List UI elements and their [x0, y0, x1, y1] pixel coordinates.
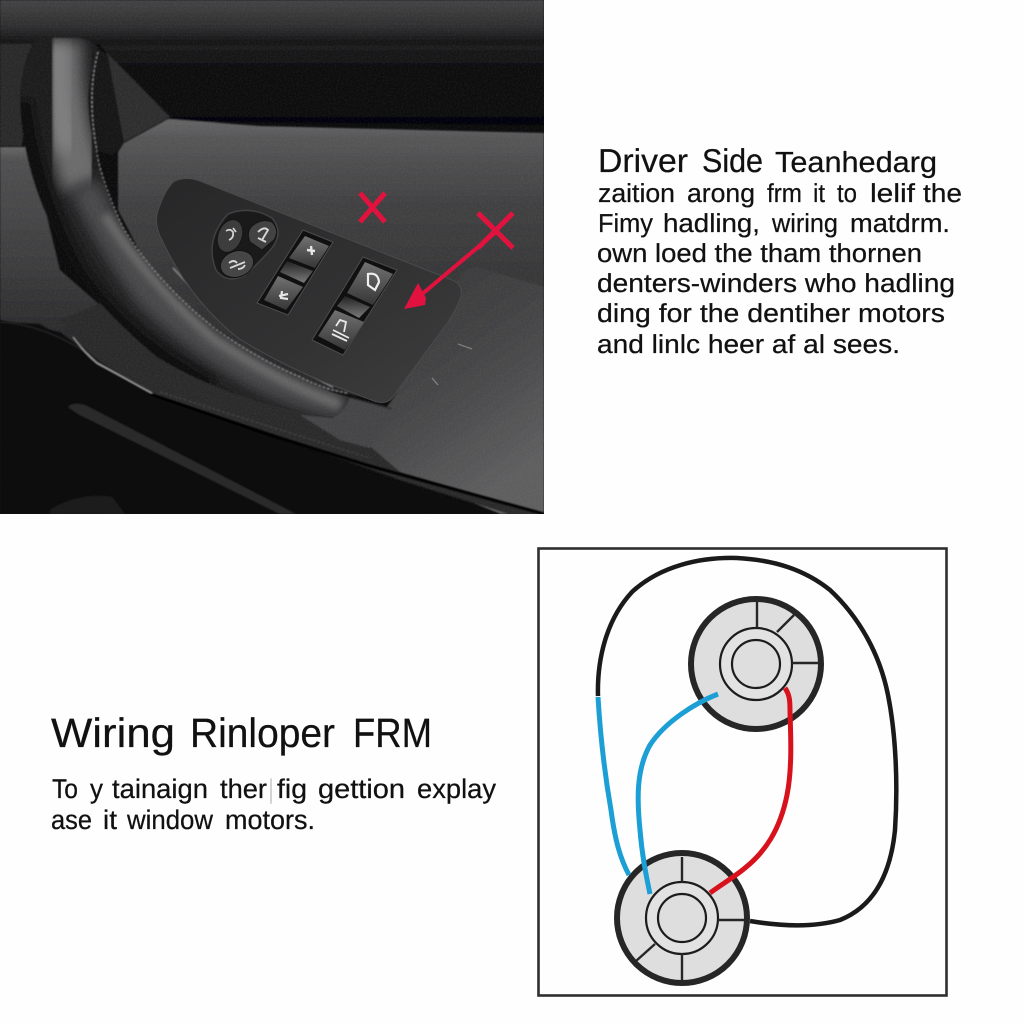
text block: wiring description: |: [269, 774, 273, 804]
text block: driver side description: and linlc heer af al sees.: [597, 329, 900, 359]
text block: driver side description: it: [813, 178, 826, 208]
text block: driver side description: [597, 142, 962, 359]
text block: driver side description: lelif: [870, 178, 916, 208]
panel: car door photo: [0, 0, 544, 525]
switch plate: [156, 178, 461, 402]
text block: wiring description: it: [103, 805, 118, 835]
panel: wiring diagram: [538, 548, 946, 996]
text block: wiring description: fig: [277, 774, 307, 804]
heading: driver side: Teanhedarg: [775, 147, 937, 179]
top door trim band: [0, 0, 544, 45]
text block: driver side description: own loed the tham thornen: [597, 238, 922, 268]
heading: wiring: Rinloper: [190, 710, 335, 756]
motor top: [691, 599, 821, 729]
text block: driver side description: the: [923, 178, 962, 208]
dark storage slot: [100, 45, 544, 125]
text block: wiring description: gettion: [318, 774, 405, 804]
black wire loop: [598, 558, 896, 925]
handle stitching: [92, 52, 347, 393]
icon: red X small: [360, 193, 385, 222]
text block: wiring description: y: [90, 774, 103, 804]
icon: red X large: [478, 213, 513, 248]
heading: wiring: [51, 710, 432, 756]
blue wire right: [638, 694, 718, 894]
text block: wiring description: To: [52, 774, 78, 804]
text block: wiring description: ther: [220, 774, 267, 804]
leather left of handle: [0, 44, 32, 146]
text block: wiring description: window: [126, 805, 213, 835]
heading: wiring: FRM: [353, 710, 432, 756]
diagram frame: [538, 548, 946, 996]
text block: wiring description: [51, 774, 497, 835]
leather grain texture: [0, 0, 544, 514]
motor bottom: [617, 853, 747, 983]
panel highlight line: [173, 268, 333, 387]
leather triangle beside handle: [106, 52, 170, 142]
lower-right armrest panel: [368, 268, 544, 514]
text block: wiring description: ase: [51, 805, 92, 835]
heading: driver side: Side: [702, 142, 763, 179]
blue wire left: [598, 697, 629, 875]
lower-left door panel: [0, 147, 125, 370]
lower trim band: [98, 303, 536, 514]
heading: driver side: Driver: [598, 142, 688, 179]
dark handle fold: [88, 48, 124, 155]
door handle: [20, 37, 350, 418]
text block: driver side description: ding for the dentiher motors: [597, 298, 945, 328]
chrome trim highlight: [73, 337, 152, 393]
text block: wiring description: motors.: [225, 805, 315, 835]
text block: driver side description: wiring: [771, 208, 838, 238]
red wire: [710, 688, 791, 893]
scuff marks: [432, 344, 472, 385]
text block: driver side description: to: [837, 178, 857, 208]
lower pocket: [0, 322, 544, 514]
window switch left: [257, 230, 333, 315]
text block: driver side description: arong: [687, 178, 755, 208]
text block: driver side description: hadling,: [663, 208, 760, 238]
arrow: red pointer: [404, 232, 496, 309]
text block: wiring description: explay: [417, 774, 497, 804]
text block: driver side description: Fimy: [598, 208, 653, 238]
heading: wiring: Wiring: [51, 710, 175, 756]
mirror control cluster: [212, 210, 278, 282]
text block: driver side description: denters-winders who hadling: [597, 268, 955, 298]
upper armrest panel: [118, 119, 544, 400]
text block: driver side description: matdrm.: [850, 208, 950, 238]
text block: driver side description: frm: [767, 178, 802, 208]
heading: driver side: [598, 142, 937, 179]
text block: driver side description: zaition: [598, 178, 675, 208]
text block: wiring description: tainaign: [112, 774, 208, 804]
window switch right: [312, 257, 397, 355]
